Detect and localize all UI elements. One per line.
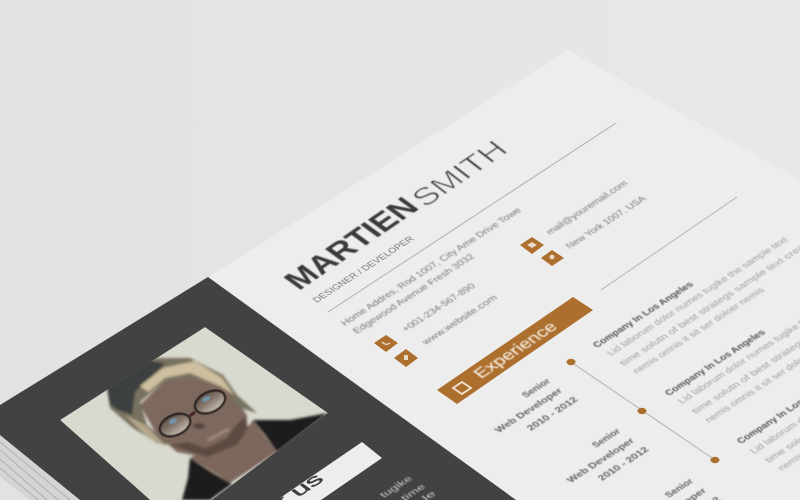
job entry 1: nemis omnis it sit ser doloer nemis (630, 286, 767, 375)
icon: phone (374, 335, 398, 352)
job entry 2 (662, 282, 800, 424)
role 3 (636, 477, 723, 500)
divider right (601, 197, 737, 290)
job entry 1: time solutn of best strategs sample text creative (617, 234, 800, 367)
phone and website: www.website.com (418, 293, 500, 347)
experience heading bar: Experience (470, 319, 562, 381)
dark sidebar panel (0, 277, 516, 500)
job title: DESIGNER / DEVELOPER (310, 234, 417, 304)
icon: briefcase (453, 382, 471, 394)
job entry 3 (734, 331, 800, 472)
role 1: 2010 - 2012 (524, 395, 580, 432)
paper stack edge (0, 433, 80, 500)
job entry 1 (590, 234, 800, 375)
portrait photo (60, 327, 328, 500)
job entry 2: Company In Los Angeles (662, 328, 768, 397)
experience heading bar (437, 297, 593, 404)
title: name: SMITH (405, 136, 515, 212)
role 2: 2010 - 2012 (595, 445, 651, 482)
address block: Edgewood Avenue Fresh 3032 (350, 252, 477, 335)
phone and website (399, 282, 500, 347)
icon: mail (520, 237, 544, 254)
role 3: Senior (662, 477, 696, 499)
contact heading bar (270, 442, 382, 500)
address block: Home Addres, Rod 1007, City Ame Drive Towe (338, 206, 524, 327)
role 2 (564, 427, 651, 484)
email and location: New York 1007, USA (563, 194, 649, 250)
email and location (543, 179, 649, 250)
title: name: MARTIEN (276, 192, 426, 295)
job entry 1: Lid laborum dolor numes tugike the sample text (604, 235, 791, 357)
role 1: Web Developer (492, 386, 565, 434)
resume sheet (208, 50, 800, 500)
contact body text (377, 474, 438, 500)
job entry 1: Company In Los Angeles (590, 280, 696, 349)
title: name (276, 136, 515, 295)
divider under name (328, 123, 616, 312)
contact body text: tugike (377, 474, 415, 499)
role 1: Senior (519, 377, 553, 399)
icon: mobile (394, 349, 418, 367)
timeline (566, 359, 720, 463)
role 2: Senior (589, 427, 623, 449)
phone and website: +001-234-567-890 (399, 282, 478, 333)
role 2: Web Developer (564, 436, 637, 484)
role 1 (492, 377, 580, 434)
icon: pin (541, 250, 564, 266)
email and location: mail@youremail.com (543, 179, 630, 236)
